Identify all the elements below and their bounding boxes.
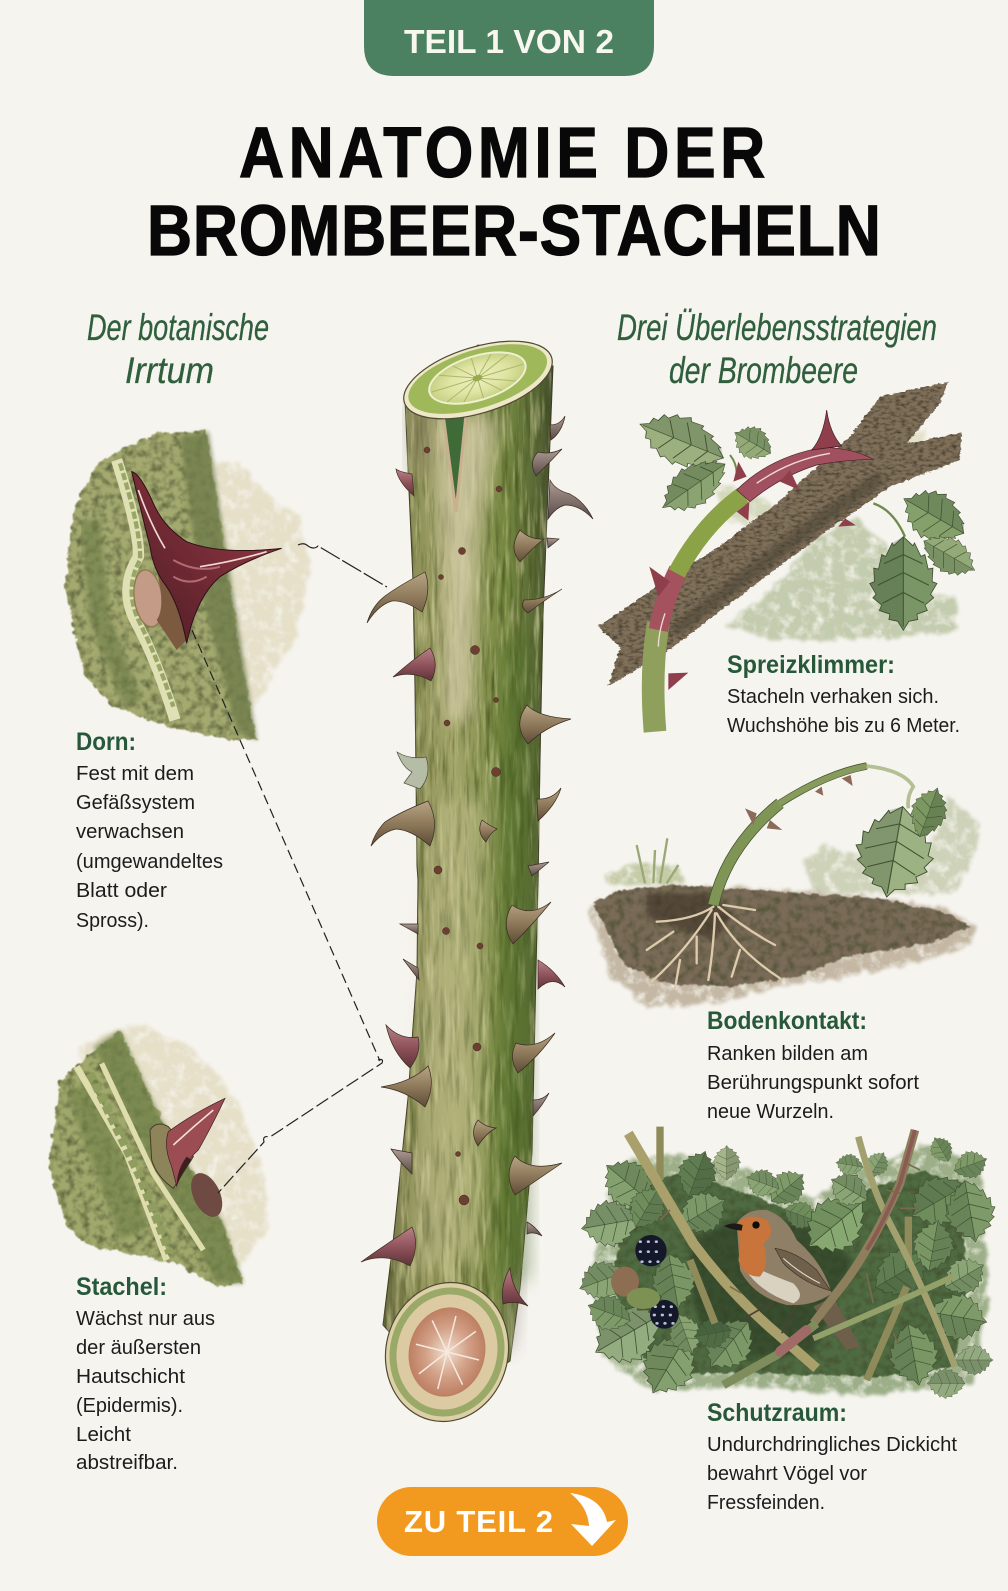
label: Bodenkontakt: Bodenkontakt: — [707, 1007, 867, 1035]
illustration: Stachel close-up — [48, 1025, 270, 1287]
label: Spreizklimmer: Spreizklimmer: — [727, 651, 895, 679]
thorns — [812, 410, 842, 450]
heading: Der botanische Irrtum: Irrtum — [125, 350, 214, 391]
label: Stachel: Hautschicht — [76, 1365, 185, 1388]
roots — [647, 905, 780, 988]
label: Dorn: Dorn: — [76, 728, 136, 756]
maroon thorn — [132, 472, 282, 643]
front canes — [813, 1130, 915, 1323]
label: Schutzraum: bewahrt Vögel vor — [707, 1462, 867, 1485]
title: ANATOMIE DER — [239, 113, 765, 193]
stem body — [383, 345, 553, 1400]
warts — [470, 646, 480, 654]
label: Schutzraum: Undurchdringliches Dickicht — [707, 1433, 957, 1456]
illustration: Bodenkontakt — [587, 766, 980, 1007]
label: Schutzraum: Fressfeinden. — [707, 1491, 825, 1514]
robin — [724, 1210, 860, 1350]
leaves — [591, 1147, 667, 1221]
heading: Der botanische Irrtum — [87, 307, 269, 391]
central bramble stem illustration — [361, 326, 593, 1435]
back canes — [660, 1127, 908, 1380]
pink thorn — [166, 1098, 225, 1186]
label: Bodenkontakt — [707, 1007, 919, 1123]
thorns — [745, 808, 757, 825]
heading: Drei Überlebensstrategien der Brombeere: der Brombeere — [669, 350, 858, 391]
prickles left — [396, 469, 414, 496]
label: Dorn: Spross). — [76, 909, 149, 932]
label: Stachel: Leicht — [76, 1423, 131, 1446]
label: Stachel: Wächst nur aus — [76, 1307, 215, 1330]
heading: Drei Überlebensstrategien der Brombeere — [617, 307, 937, 391]
icon: curved arrow — [570, 1493, 616, 1546]
bottom cut face — [371, 1269, 523, 1435]
button: Zu Teil 2 — [377, 1487, 628, 1556]
label: Dorn: Blatt oder — [76, 879, 167, 902]
label: Stachel: Stachel: — [76, 1273, 167, 1301]
soil — [587, 887, 977, 1007]
berries — [635, 1235, 667, 1266]
label: Dorn: Fest mit dem — [76, 762, 194, 785]
top cut face — [395, 326, 561, 434]
leaves — [848, 800, 941, 904]
connector lines — [192, 544, 387, 1193]
label: Stachel: abstreifbar. — [76, 1451, 178, 1474]
label: Spreizklimmer: Wuchshöhe bis zu 6 Meter. — [727, 714, 960, 737]
branch — [598, 382, 962, 687]
label: Dorn — [76, 728, 223, 932]
label: Stachel: der äußersten — [76, 1336, 201, 1359]
pale upper wash — [435, 415, 500, 720]
badge: Teil 1 von 2 — [364, 0, 654, 76]
bark split — [443, 405, 467, 512]
heading: Der botanische Irrtum: Der botanische — [87, 307, 269, 348]
badge: Teil 1 von 2: TEIL 1 VON 2 — [404, 23, 614, 60]
label: Dorn: verwachsen — [76, 820, 184, 843]
label: Dorn: Gefäßsystem — [76, 791, 195, 814]
stem — [713, 803, 780, 905]
rambling cane — [653, 623, 658, 732]
title: BROMBEER-STACHELN — [147, 191, 881, 271]
label: Bodenkontakt: Ranken bilden am — [707, 1042, 868, 1065]
label: Bodenkontakt: neue Wurzeln. — [707, 1100, 834, 1123]
label: Bodenkontakt: Berührungspunkt sofort — [707, 1071, 919, 1094]
button: Zu Teil 2: ZU TEIL 2 — [404, 1504, 553, 1539]
illustration: Spreizklimmer — [598, 382, 984, 732]
prickles right — [550, 416, 565, 440]
label: Schutzraum — [707, 1399, 957, 1514]
illustration: Dorn close-up — [65, 430, 310, 740]
label: Spreizklimmer: Stacheln verhaken sich. — [727, 685, 939, 708]
illustration: Schutzraum thicket — [573, 1127, 1000, 1406]
label: Stachel: (Epidermis). — [76, 1394, 183, 1417]
leaves — [631, 401, 733, 481]
label: Schutzraum: Schutzraum: — [707, 1399, 847, 1427]
label: Spreizklimmer — [727, 651, 960, 737]
label: Stachel — [76, 1273, 215, 1474]
label: Dorn: (umgewandeltes — [76, 850, 223, 873]
title — [147, 113, 881, 271]
